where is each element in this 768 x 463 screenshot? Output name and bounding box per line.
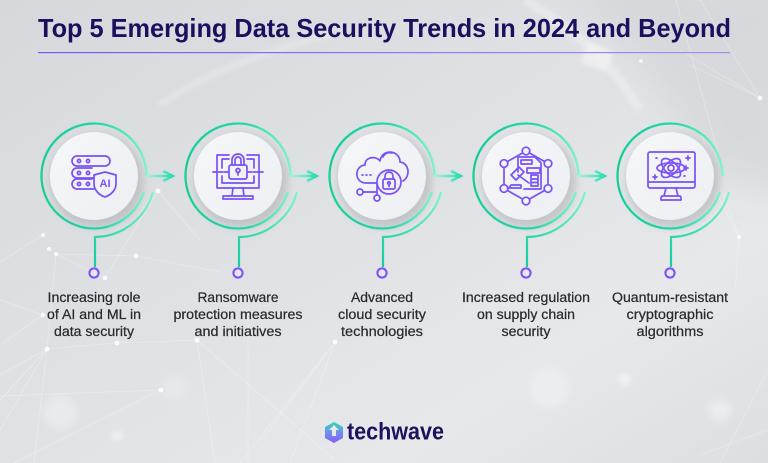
label: step 2: Ransomware xyxy=(198,290,278,305)
label: step 4: Increased regulation xyxy=(462,290,590,305)
icon: logo hexagon xyxy=(325,422,343,443)
connector dot xyxy=(665,268,675,278)
outer arc and connector xyxy=(527,192,585,267)
disc shadow xyxy=(50,134,144,228)
label: step 4: on supply chain xyxy=(477,307,575,322)
label: step 1: data security xyxy=(54,324,134,339)
icon: gavel and document in hexagon xyxy=(500,147,552,205)
outer arc and connector xyxy=(95,192,153,267)
connector dot xyxy=(233,268,243,278)
label: step 5: algorithms xyxy=(636,324,704,339)
icon: atom on monitor xyxy=(648,152,695,200)
disc shadow xyxy=(482,134,576,228)
label: step 4: security xyxy=(502,324,551,339)
ring xyxy=(42,123,146,228)
label: step 3 xyxy=(338,290,426,339)
disc xyxy=(338,132,426,220)
ring xyxy=(330,123,434,228)
arrow xyxy=(578,171,605,181)
outer arc and connector xyxy=(671,192,729,267)
arrow xyxy=(290,171,317,181)
connector dot xyxy=(521,268,531,278)
icon: server with AI shield xyxy=(72,156,116,197)
ring xyxy=(474,123,578,228)
outer arc and connector xyxy=(383,192,441,267)
disc xyxy=(482,132,570,220)
disc shadow xyxy=(338,134,432,228)
step 2: ransomware xyxy=(186,123,317,278)
disc xyxy=(626,132,714,220)
ring xyxy=(618,123,722,228)
arrow xyxy=(146,171,173,181)
label: step 2: protection measures xyxy=(174,307,303,322)
connector dot xyxy=(377,268,387,278)
logo wordmark: techwave xyxy=(347,418,444,446)
icon: cloud with lock xyxy=(357,152,408,201)
icon label: AI: AI xyxy=(100,178,110,190)
label: step 1: Increasing role xyxy=(48,290,140,305)
outer arc and connector xyxy=(239,192,297,267)
disc xyxy=(50,132,138,220)
label: step 1 xyxy=(47,290,141,339)
icon: locked monitor xyxy=(213,154,263,199)
arrow xyxy=(434,171,461,181)
label: step 1: of AI and ML in xyxy=(47,307,141,322)
title rule xyxy=(38,52,730,53)
step 3: cloud security xyxy=(330,123,461,278)
disc shadow xyxy=(194,134,288,228)
label: step 4 xyxy=(462,290,590,339)
label: step 5: Quantum-resistant xyxy=(612,290,728,305)
label: step 5: cryptographic xyxy=(626,307,714,322)
disc xyxy=(194,132,282,220)
step 4: supply chain regulation xyxy=(474,123,605,278)
step 1: AI and ML xyxy=(42,123,173,278)
step 5: quantum-resistant xyxy=(618,123,729,278)
disc shadow xyxy=(626,134,720,228)
logo: techwave xyxy=(325,418,444,446)
label: step 5 xyxy=(612,290,728,339)
label: step 2 xyxy=(174,290,303,339)
label: step 2: and initiatives xyxy=(194,324,282,339)
label: step 3: cloud security xyxy=(338,307,426,322)
label: step 3: Advanced xyxy=(351,290,413,305)
connector dot xyxy=(89,268,99,278)
label: step 3: technologies xyxy=(341,324,423,339)
ring xyxy=(186,123,290,228)
title: Top 5 Emerging Data Security Trends in 2024 and Beyond xyxy=(38,13,731,43)
